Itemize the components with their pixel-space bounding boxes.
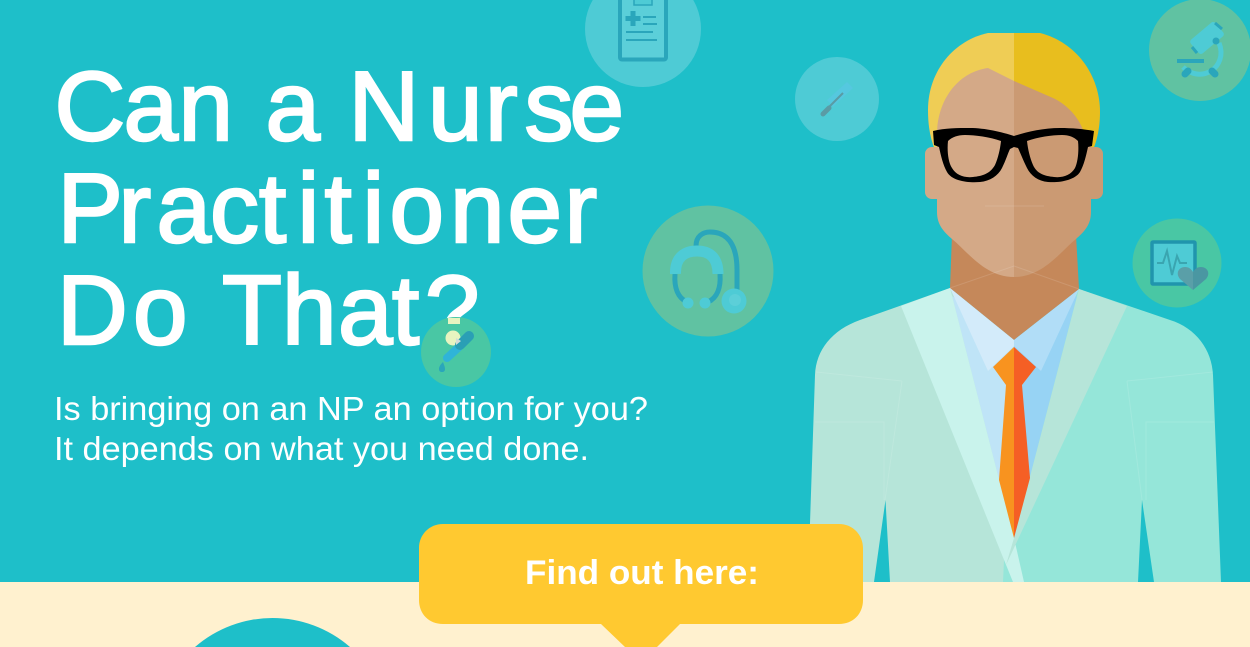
subtitle: Is bringing on an NP an option for you? [54,390,648,427]
seams [815,206,1214,500]
icon: scalpel [795,57,879,141]
shirt [952,296,1077,538]
partial teal circle [195,618,350,647]
callout: find out here [419,524,863,647]
icon: clipboard [585,0,701,87]
face [937,68,1091,277]
jacket right [1003,289,1221,582]
title: Can a Nurse [54,51,624,161]
subtitle: It depends on what you need done. [54,430,589,467]
icon: dropper [421,317,491,387]
neck [950,235,1079,340]
tie [993,347,1036,538]
hair [928,33,1100,150]
jacket left [808,288,1014,582]
glasses [933,128,1094,182]
icon: stethoscope [642,206,774,336]
subtitle [54,390,648,467]
collar [950,288,1079,371]
ears [925,147,1103,199]
callout: find out here: Find out here: [525,554,759,592]
title [54,51,624,365]
icon: heart monitor [1132,218,1222,308]
icon: microscope [1149,0,1250,101]
nurse practitioner figure [808,33,1221,582]
left lapel [901,288,1024,582]
title: Practitioner [58,153,597,263]
right lapel [1006,289,1127,565]
cream lower band [0,582,1250,647]
title: Do That? [57,255,480,365]
